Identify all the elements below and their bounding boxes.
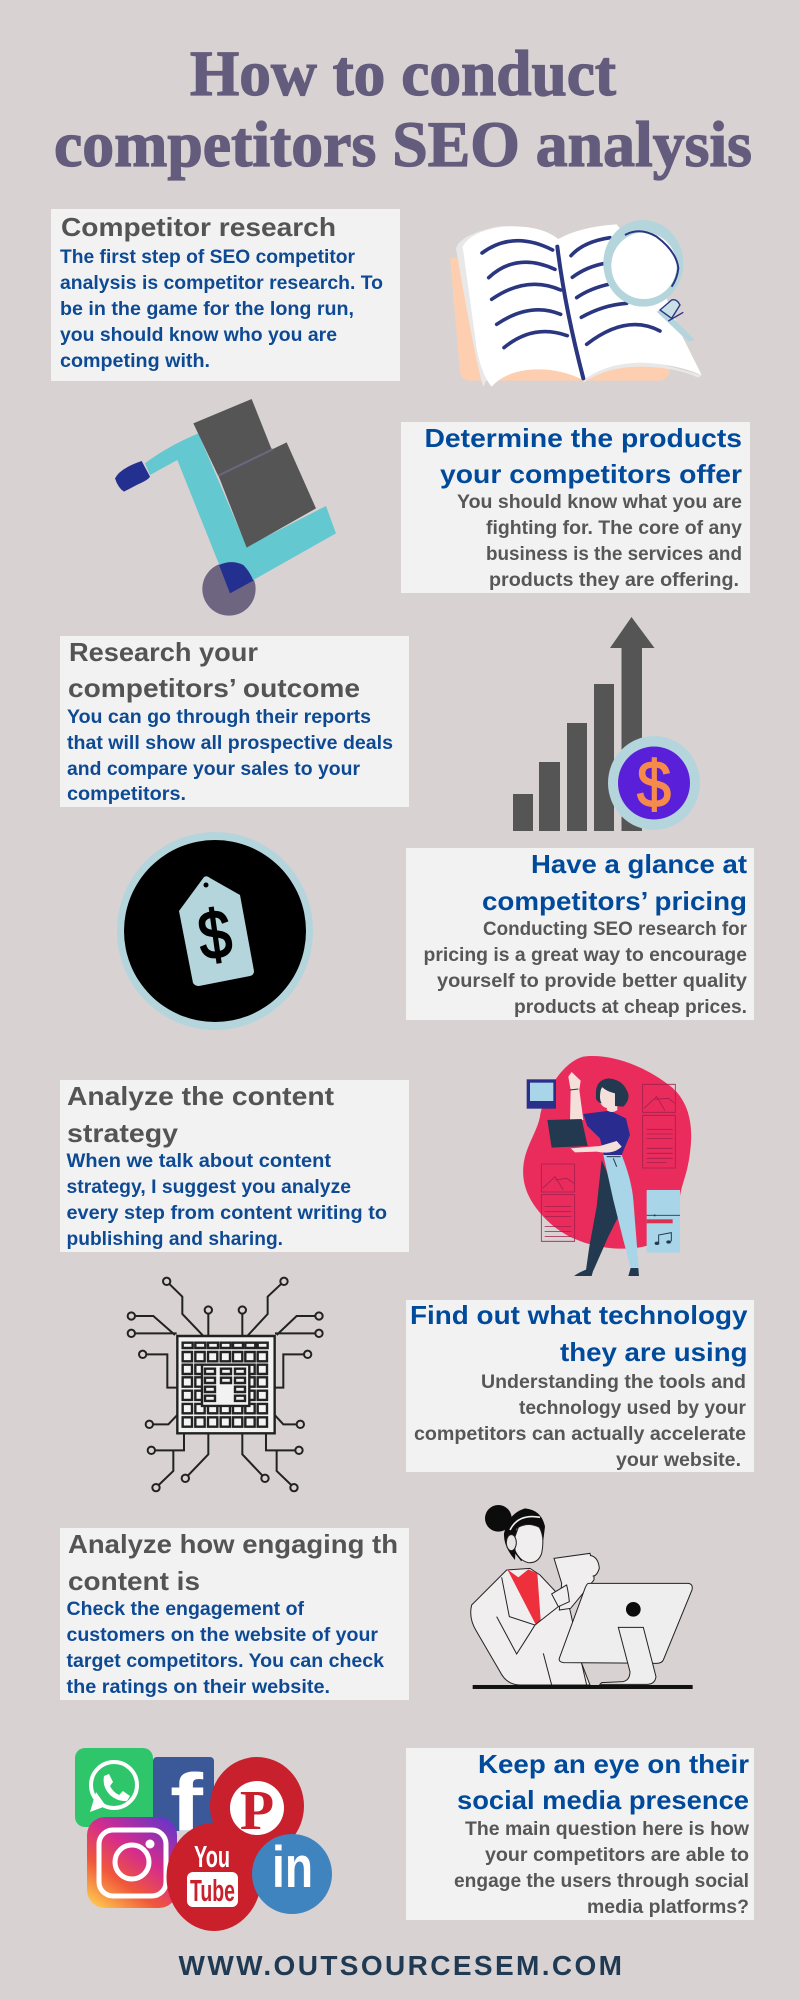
heading: content strategy: strategy <box>67 1118 179 1148</box>
text block: social media: engage the users through social <box>454 1871 749 1892</box>
icons: social media logos <box>75 1748 332 1931</box>
text block: social media: your competitors are able to <box>485 1845 749 1866</box>
text block: competitor research: be in the game for the long run, <box>60 299 354 320</box>
icon: woman with laptop on pink blob <box>523 1056 691 1276</box>
heading: research outcome <box>68 637 360 703</box>
heading: content strategy <box>67 1081 334 1148</box>
title: How to conduct <box>190 38 616 110</box>
icon: facebook <box>153 1757 214 1849</box>
icon: linkedin <box>252 1834 332 1914</box>
text block: technology: technology used by your <box>519 1398 747 1419</box>
text block: pricing: products at cheap prices. <box>514 997 747 1018</box>
icon: dollar coin: $ <box>637 747 671 821</box>
panel: have a glance at competitors' pricing <box>406 848 754 1020</box>
title: competitors SEO analysis <box>54 109 752 181</box>
panel: keep an eye on social media <box>406 1748 754 1920</box>
heading: pricing: competitors’ pricing <box>482 886 747 916</box>
chart: rising bars with arrow and coin <box>513 617 700 831</box>
panel: analyze how engaging the content is <box>60 1528 409 1700</box>
title <box>54 38 752 181</box>
text block: content strategy: publishing and sharing. <box>66 1229 283 1250</box>
icon: linkedin: in <box>272 1835 313 1900</box>
text block: determine the products: fighting for. The core of any <box>486 518 742 539</box>
panel: research your competitors' outcome <box>60 636 409 807</box>
icon: youtube <box>166 1823 262 1931</box>
text block: engaging content: the ratings on their website. <box>66 1677 330 1698</box>
text block: content strategy <box>66 1151 387 1250</box>
icon: circuit chip <box>128 1278 323 1491</box>
heading: technology <box>410 1300 748 1367</box>
heading: determine the products <box>424 423 742 489</box>
icon: facebook: f <box>170 1758 204 1849</box>
heading: engaging content <box>68 1529 398 1596</box>
text block: social media: The main question here is how <box>465 1819 749 1840</box>
heading: content strategy: Analyze the content <box>67 1081 334 1111</box>
icon: whatsapp <box>75 1748 153 1827</box>
heading: determine the products: Determine the products <box>424 423 742 453</box>
heading: engaging content: content is <box>68 1566 200 1596</box>
text block: engaging content: customers on the website of your <box>66 1625 379 1646</box>
text block: determine the products: business is the services and <box>486 544 742 565</box>
text block: technology <box>414 1372 747 1471</box>
heading: pricing: Have a glance at <box>531 849 747 879</box>
text block: competitor research: you should know who you are <box>60 325 337 346</box>
heading: social media: social media presence <box>457 1785 749 1815</box>
heading: technology: they are using <box>560 1337 748 1367</box>
text block: research outcome: that will show all prospective deals <box>67 733 393 754</box>
heading: pricing <box>482 849 747 916</box>
text block: social media: media platforms? <box>587 1897 749 1918</box>
text block: determine the products: You should know what you are <box>457 492 742 513</box>
heading: social media: Keep an eye on their <box>478 1749 749 1779</box>
heading: research outcome: competitors’ outcome <box>68 673 360 703</box>
text block: pricing: pricing is a great way to encourage <box>424 945 747 966</box>
text block: technology: competitors can actually accelerate <box>414 1424 746 1445</box>
icon: pinterest: P <box>240 1780 274 1842</box>
text block: engaging content <box>66 1599 384 1698</box>
text block: competitor research: analysis is competitor research. To <box>60 273 383 294</box>
heading: technology: Find out what technology <box>410 1300 748 1330</box>
icon: instagram <box>87 1817 177 1908</box>
text block: engaging content: target competitors. You can check <box>66 1651 384 1672</box>
text block: research outcome: competitors. <box>67 784 186 805</box>
text block: competitor research: competing with. <box>60 351 210 372</box>
text block: research outcome: and compare your sales to your <box>67 759 361 780</box>
text block: engaging content: Check the engagement of <box>66 1599 305 1620</box>
panel: determine the products <box>401 422 750 593</box>
text block: determine the products: products they are offering. <box>489 570 739 591</box>
text block: determine the products <box>457 492 742 591</box>
text block: pricing <box>424 919 748 1018</box>
icon: hand truck with boxes <box>115 399 336 616</box>
text block: technology: Understanding the tools and <box>481 1372 746 1393</box>
heading: competitor research: Competitor research <box>61 212 336 242</box>
heading: determine the products: your competitors offer <box>440 459 742 489</box>
icon: open book with magnifier <box>450 220 702 387</box>
text block: research outcome: You can go through their reports <box>67 707 371 728</box>
icon: dollar coin <box>608 736 700 830</box>
panel: competitor research <box>51 209 400 381</box>
icon: price tag on black circle: $ <box>194 896 236 975</box>
text block: content strategy: When we talk about content <box>66 1151 332 1172</box>
icon: price tag on black circle <box>117 832 313 1030</box>
text block: technology: your website. <box>616 1450 741 1471</box>
text block: pricing: yourself to provide better quality <box>437 971 747 992</box>
text block: competitor research: The first step of SEO competitor <box>60 247 356 268</box>
heading: engaging content: Analyze how engaging th <box>68 1529 398 1559</box>
icon: pinterest <box>210 1757 304 1855</box>
text block: pricing: Conducting SEO research for <box>483 919 748 940</box>
text block: content strategy: every step from content writing to <box>66 1203 387 1224</box>
footer url: WWW.OUTSOURCESEM.COM <box>178 1950 622 1981</box>
text block: social media <box>454 1819 749 1918</box>
icon: woman with headset at computer <box>471 1505 693 1689</box>
text block: content strategy: strategy, I suggest you analyze <box>66 1177 351 1198</box>
text block: competitor research <box>60 247 383 372</box>
heading: social media <box>457 1749 749 1815</box>
panel: analyze the content strategy <box>60 1080 409 1252</box>
icon: youtube: Tube <box>190 1873 235 1908</box>
panel: find out what technology <box>406 1300 754 1472</box>
icon: youtube: You <box>194 1839 230 1874</box>
heading: research outcome: Research your <box>69 637 258 667</box>
text block: research outcome <box>67 707 393 805</box>
